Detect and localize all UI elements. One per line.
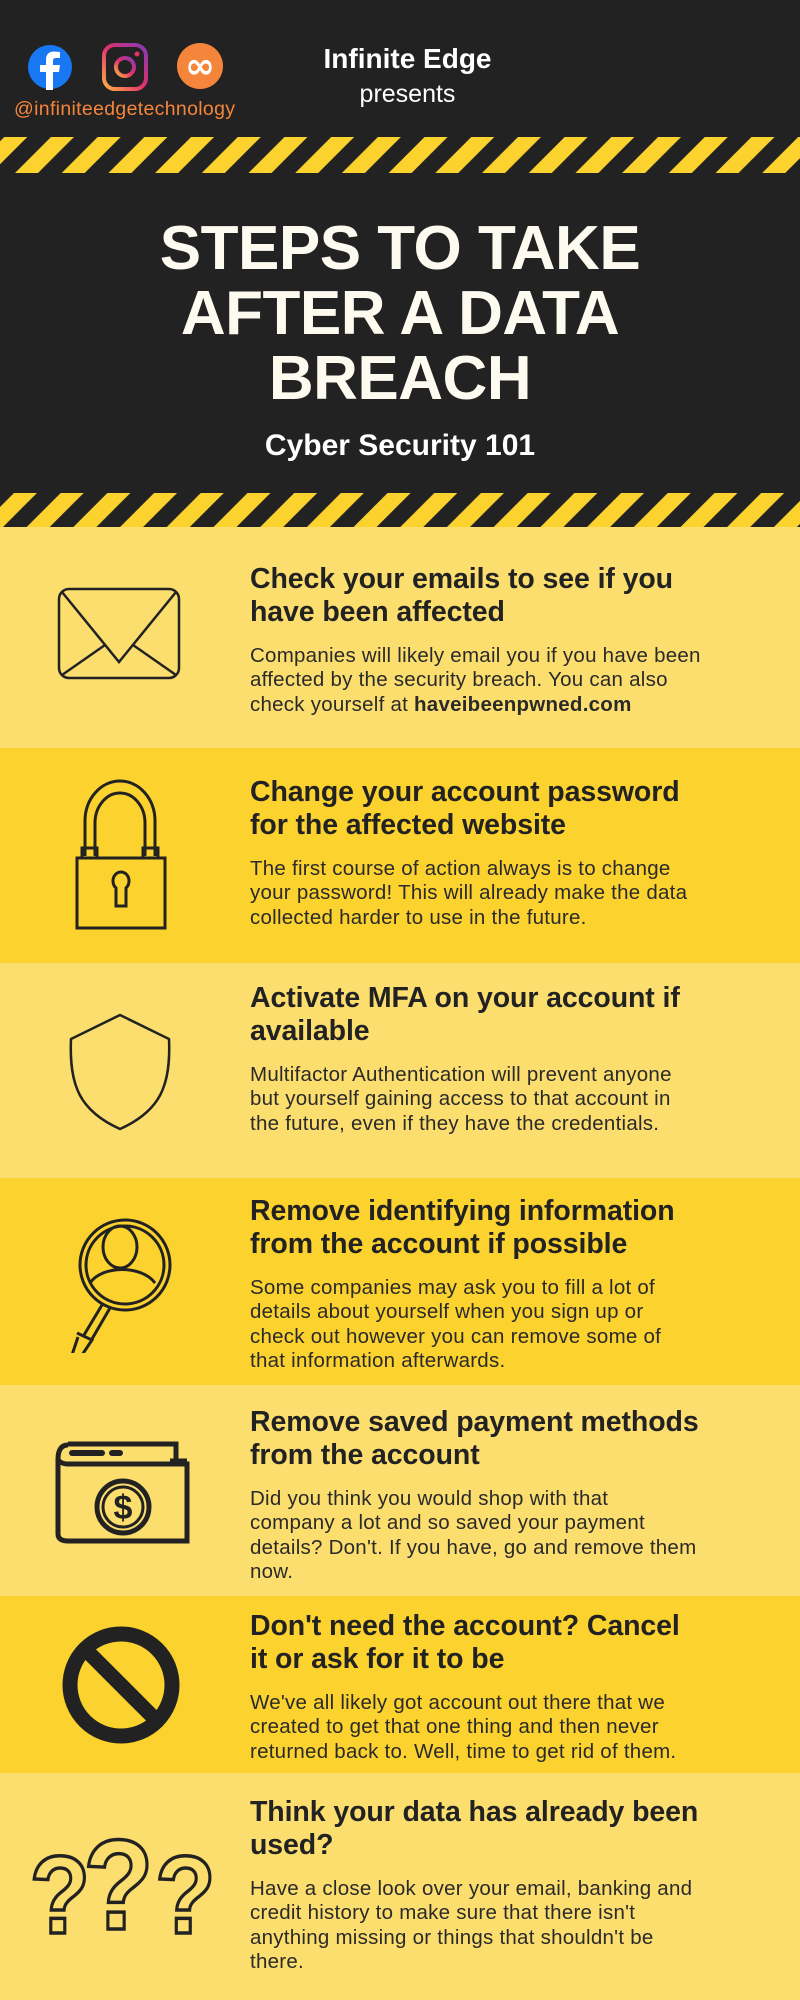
text block: company a lot and so saved your payment	[250, 1511, 645, 1534]
text block: Don't need the account? Cancel	[250, 1610, 680, 1642]
text block	[250, 1610, 680, 1763]
title	[160, 214, 640, 413]
icon: facebook	[28, 45, 72, 90]
icon: instagram	[104, 45, 146, 89]
text block: credit history to make sure that there isn't	[250, 1901, 635, 1924]
title: AFTER A DATA	[181, 279, 619, 348]
handle: @infiniteedgetechnology	[14, 98, 235, 120]
social icons	[14, 43, 235, 120]
icon: wallet: $	[114, 1489, 133, 1527]
text block: check yourself at haveibeenpwned.com	[250, 693, 632, 716]
text block: returned back to. Well, time to get rid of them.	[250, 1740, 676, 1763]
text block: Multifactor Authentication will prevent anyone	[250, 1063, 672, 1086]
text block: details about yourself when you sign up or	[250, 1300, 643, 1323]
icon: magnifier with person	[71, 1218, 172, 1353]
text block: that information afterwards.	[250, 1349, 505, 1372]
stripe band top	[0, 137, 800, 173]
text block: Check your emails to see if you	[250, 563, 673, 595]
text block	[250, 1796, 698, 1973]
text block: We've all likely got account out there that we	[250, 1691, 665, 1714]
presenter text	[324, 43, 492, 108]
text block: Some companies may ask you to fill a lot of	[250, 1276, 655, 1299]
text block: Activate MFA on your account if	[250, 982, 680, 1014]
subtitle: Cyber Security 101	[265, 429, 535, 462]
presenter text: presents	[360, 80, 455, 108]
text block: there.	[250, 1950, 304, 1973]
text block: it or ask for it to be	[250, 1643, 504, 1675]
text block: your password! This will already make the data	[250, 881, 687, 904]
panel: change password	[0, 748, 800, 963]
header panel	[0, 0, 800, 527]
panel: cancel account	[0, 1596, 800, 1773]
text block: now.	[250, 1560, 293, 1583]
panel: data already used	[0, 1773, 800, 2000]
text block: Companies will likely email you if you have been	[250, 644, 701, 667]
text block: anything missing or things that shouldn't be	[250, 1926, 654, 1949]
text block: Change your account password	[250, 776, 680, 808]
icon: padlock	[76, 780, 166, 930]
title: BREACH	[269, 344, 531, 413]
text block: check out however you can remove some of	[250, 1325, 661, 1348]
text block: created to get that one thing and then never	[250, 1715, 659, 1738]
text block: available	[250, 1015, 370, 1047]
text block	[250, 1195, 675, 1372]
text block: Remove identifying information	[250, 1195, 675, 1227]
text block: The first course of action always is to change	[250, 857, 671, 880]
text block	[250, 982, 680, 1135]
icon: infinity logo: ∞	[185, 46, 215, 87]
text block: Have a close look over your email, banking and	[250, 1877, 692, 1900]
panel: remove payment methods	[0, 1385, 800, 1596]
text block: for the affected website	[250, 809, 566, 841]
text block: Did you think you would shop with that	[250, 1487, 608, 1510]
text block	[250, 776, 688, 929]
presenter text: Infinite Edge	[324, 43, 492, 74]
text block: the future, even if they have the credentials.	[250, 1112, 659, 1135]
text block: details? Don't. If you have, go and remove them	[250, 1536, 696, 1559]
text block: collected harder to use in the future.	[250, 906, 587, 929]
text block: used?	[250, 1829, 333, 1861]
text block: have been affected	[250, 596, 505, 628]
icon: envelope	[58, 588, 180, 680]
panel: activate MFA	[0, 963, 800, 1178]
icon: shield	[70, 1014, 170, 1130]
icon: question marks	[30, 1821, 216, 1946]
text block: Remove saved payment methods	[250, 1406, 699, 1438]
text block	[250, 563, 701, 716]
text block	[250, 1406, 699, 1583]
text block: Think your data has already been	[250, 1796, 698, 1828]
title: STEPS TO TAKE	[160, 214, 640, 283]
icon: wallet	[56, 1442, 190, 1544]
stripe band bottom	[0, 493, 800, 527]
text block: but yourself gaining access to that account in	[250, 1087, 671, 1110]
panel: remove identifying info	[0, 1178, 800, 1385]
panel: check emails	[0, 527, 800, 748]
icon: infinity logo	[177, 43, 223, 89]
text block: affected by the security breach. You can also	[250, 668, 668, 691]
text block: from the account	[250, 1439, 480, 1471]
icon: ban sign	[62, 1626, 180, 1744]
text block: from the account if possible	[250, 1228, 627, 1260]
